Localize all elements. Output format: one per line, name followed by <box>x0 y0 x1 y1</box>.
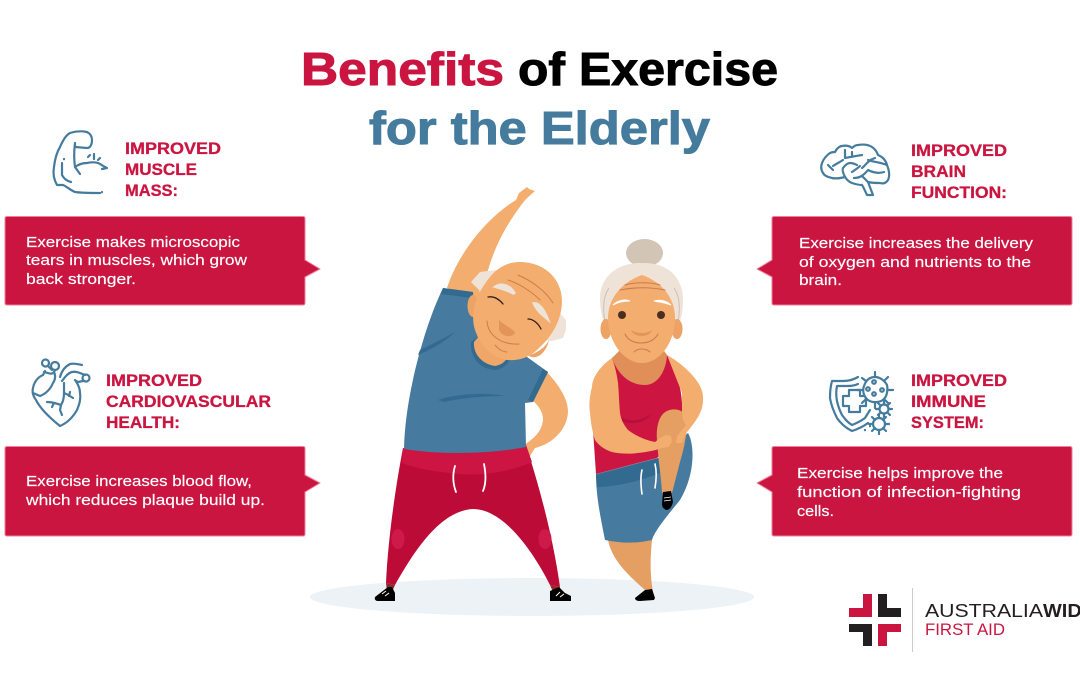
chest <box>612 345 667 385</box>
heading: MUSCLE <box>125 161 197 179</box>
illustration: elderly woman balancing <box>589 239 703 601</box>
heading: CARDIOVASCULAR <box>106 393 271 411</box>
heading <box>125 140 221 200</box>
heading: FUNCTION: <box>911 184 1007 202</box>
logo mark <box>849 594 901 646</box>
shirt <box>404 288 548 453</box>
callout text: of oxygen and nutrients to the <box>799 254 1031 271</box>
callout text <box>26 234 247 288</box>
callout <box>5 446 320 536</box>
heading <box>911 142 1007 202</box>
logo: Australia Wide First Aid <box>849 588 1080 652</box>
title: for the Elderly <box>369 102 710 154</box>
tank top <box>593 352 682 474</box>
smile and wrinkles <box>487 275 553 352</box>
knee patches <box>392 529 404 549</box>
eyebrows <box>494 284 549 321</box>
icon: brain <box>821 145 889 195</box>
callout text: tears in muscles, which grow <box>26 252 247 269</box>
heading: IMPROVED <box>125 140 221 158</box>
callout text <box>797 465 1021 520</box>
neck and collar <box>471 335 510 370</box>
panel: improved cardiovascular health <box>5 360 320 536</box>
ears <box>600 319 612 339</box>
lower arm on hip <box>518 371 568 462</box>
icon: flexed arm <box>53 131 107 193</box>
heading: SYSTEM: <box>911 414 984 432</box>
drawstrings <box>641 464 656 494</box>
heading: HEALTH: <box>106 414 180 432</box>
standing leg <box>608 540 653 592</box>
heading: BRAIN <box>911 163 966 181</box>
shirt shading <box>418 288 548 402</box>
heading <box>911 372 1007 432</box>
panel: improved immune system <box>757 372 1072 536</box>
closed eyes <box>488 297 541 329</box>
hair shading <box>604 288 679 322</box>
heading: IMPROVED <box>911 142 1007 160</box>
callout text: brain. <box>799 272 842 289</box>
face <box>608 275 675 363</box>
callout text: Exercise increases the delivery <box>799 235 1034 252</box>
callout text: cells. <box>797 503 834 520</box>
title <box>301 43 778 154</box>
heading <box>106 372 271 432</box>
shoes <box>375 587 571 601</box>
callout text <box>799 235 1034 289</box>
callout text <box>25 473 265 509</box>
skirt <box>596 433 693 543</box>
left arm <box>589 358 672 454</box>
trousers <box>386 445 560 587</box>
callout text: which reduces plaque build up. <box>25 492 265 509</box>
callout <box>757 216 1072 305</box>
skirt waistband shading <box>596 458 660 487</box>
nose <box>499 320 515 336</box>
tank shading <box>620 413 652 423</box>
shoe <box>635 589 655 601</box>
panel: improved brain function <box>757 142 1072 305</box>
smile and wrinkles <box>620 283 665 352</box>
heading: IMPROVED <box>106 372 202 390</box>
hair bun <box>626 239 663 267</box>
head <box>473 262 562 360</box>
heading: MASS: <box>125 182 178 200</box>
hair <box>600 263 683 328</box>
panel: improved muscle mass <box>5 131 320 305</box>
callout text: Exercise helps improve the <box>797 465 1003 482</box>
heading: IMMUNE <box>911 393 986 411</box>
callout text: Exercise makes microscopic <box>26 234 241 251</box>
logo divider <box>912 588 913 652</box>
drawstrings <box>453 464 485 492</box>
icon: shield with virus <box>830 372 893 434</box>
logo text: FIRST AID <box>925 620 1005 639</box>
illustration: elderly man stretching <box>375 187 571 601</box>
callout text: back stronger. <box>26 271 136 288</box>
callout text: Exercise increases blood flow, <box>26 473 252 490</box>
trousers waistband <box>402 445 532 474</box>
raised foot shoe <box>662 491 673 510</box>
nose <box>631 330 652 336</box>
hair tufts <box>471 270 566 341</box>
ears <box>468 295 478 317</box>
title: Exercise <box>579 43 778 95</box>
heading: IMPROVED <box>911 372 1007 390</box>
title: Benefits <box>301 43 504 95</box>
logo text: AUSTRALIA <box>925 601 1043 621</box>
callout <box>5 216 320 305</box>
ground shadow <box>310 578 754 616</box>
title: of <box>518 43 566 95</box>
logo text <box>925 601 1080 639</box>
right arm <box>667 355 703 443</box>
raised arm <box>447 187 535 300</box>
raised leg <box>657 409 687 493</box>
eyebrows and eyes <box>613 300 671 305</box>
icon: heart <box>33 360 90 426</box>
ankles <box>386 583 560 592</box>
callout text: function of infection-fighting <box>797 484 1021 501</box>
callout <box>757 446 1072 536</box>
